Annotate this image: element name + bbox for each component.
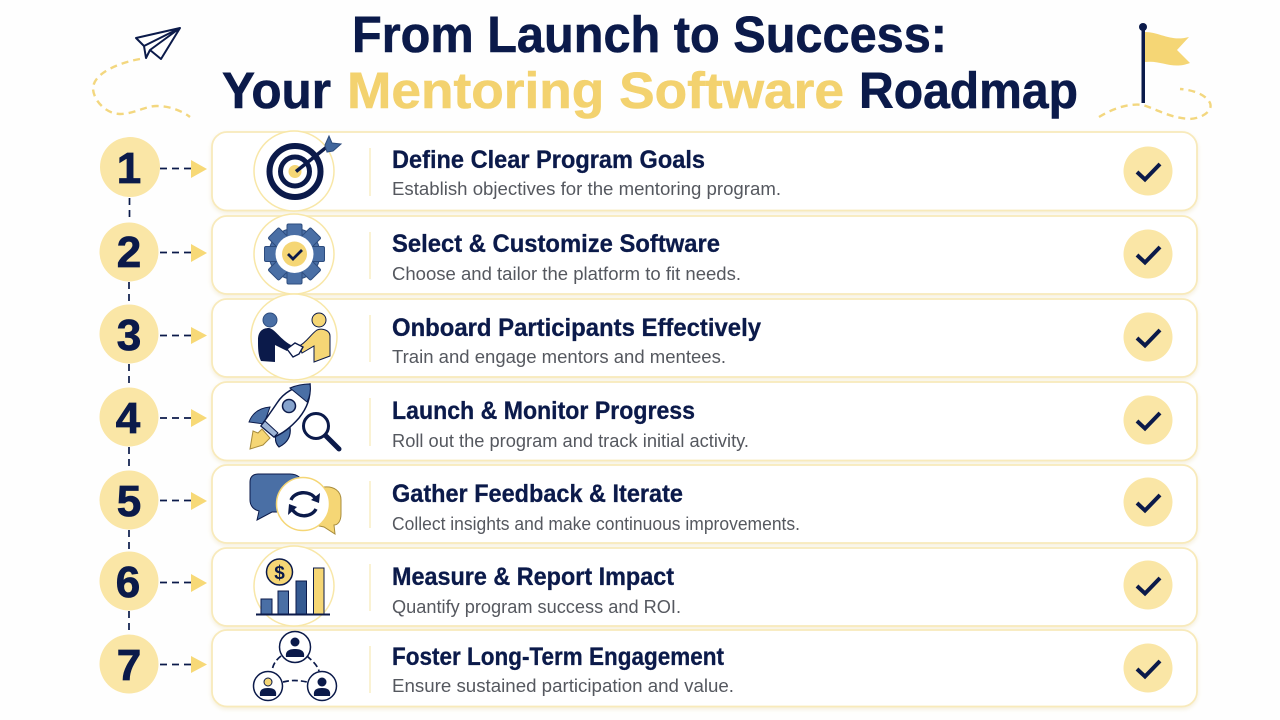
divider (369, 315, 371, 362)
arrow 7 (160, 656, 207, 673)
check 7 (1124, 644, 1172, 692)
divider (369, 398, 371, 446)
icon: target with arrow (254, 131, 341, 211)
title: Your (222, 62, 331, 119)
card 7 (212, 630, 1197, 706)
icon: flag with dashed trail (1099, 23, 1211, 119)
heading and text 3: Onboard Participants Effectively (392, 314, 761, 342)
icon: coin and bar chart: $ (274, 563, 285, 584)
heading and text 6: Measure & Report Impact (392, 563, 675, 591)
number badge 5: 5 (117, 477, 141, 526)
heading and text 4: Roll out the program and track initial activity. (392, 431, 749, 451)
number badge 7 (100, 634, 158, 694)
card 2 (212, 216, 1197, 294)
arrow 4 (160, 409, 207, 427)
heading and text 6 (392, 563, 681, 617)
icon: connected people network (254, 632, 336, 700)
icon: paper plane with dashed trail (93, 28, 190, 117)
heading and text 2: Choose and tailor the platform to fit needs. (392, 264, 741, 284)
title: Mentoring Software (347, 62, 844, 119)
number badge 2: 2 (117, 228, 141, 277)
divider (369, 481, 371, 528)
divider (369, 148, 371, 196)
number badge 1: 1 (117, 144, 141, 193)
icon: handshake (251, 294, 337, 380)
icon: rocket and magnifier (249, 384, 339, 449)
icon: gear with check (254, 214, 334, 294)
card 1 (212, 132, 1197, 210)
step 7 (100, 630, 1197, 706)
step 5 (100, 465, 1197, 543)
title: Roadmap (859, 62, 1078, 119)
arrow 5 (160, 492, 207, 510)
heading and text 7: Foster Long-Term Engagement (392, 643, 725, 671)
number badge 6 (100, 552, 158, 610)
heading and text 6: Quantify program success and ROI. (392, 597, 681, 617)
heading and text 1 (392, 146, 781, 199)
title: From Launch to Success: (352, 6, 947, 63)
number badge 3 (100, 304, 158, 364)
title (222, 6, 1078, 119)
card 5 (212, 465, 1197, 543)
number badge 6: 6 (116, 558, 140, 607)
heading and text 5: Collect insights and make continuous improvements. (392, 514, 800, 534)
divider (369, 646, 371, 693)
heading and text 2: Select & Customize Software (392, 230, 720, 258)
heading and text 3: Train and engage mentors and mentees. (392, 347, 726, 367)
heading and text 1: Establish objectives for the mentoring program. (392, 179, 781, 199)
heading and text 4 (392, 397, 749, 451)
number badge 3: 3 (117, 311, 141, 360)
number badge 5 (100, 470, 158, 530)
heading and text 7: Ensure sustained participation and value. (392, 676, 734, 696)
step 4 (100, 382, 1197, 460)
heading and text 4: Launch & Monitor Progress (392, 397, 695, 425)
divider (369, 232, 371, 279)
step 6 (100, 546, 1197, 626)
arrow 2 (160, 244, 207, 262)
heading and text 3 (392, 314, 761, 367)
heading and text 1: Define Clear Program Goals (392, 146, 705, 174)
arrow 6 (160, 574, 207, 592)
check 3 (1124, 312, 1172, 362)
icon: chat bubbles with refresh (250, 474, 341, 534)
number badge 7: 7 (117, 641, 141, 690)
check 5 (1124, 478, 1172, 526)
check 4 (1124, 396, 1172, 444)
timeline connector (128, 198, 130, 634)
card 6 (212, 548, 1197, 626)
number badge 1 (100, 137, 160, 197)
icon: coin and bar chart (254, 546, 334, 626)
number badge 4: 4 (116, 394, 141, 443)
check 2 (1124, 230, 1172, 278)
step 3 (100, 294, 1197, 380)
check 6 (1124, 560, 1172, 610)
card 4 (212, 382, 1197, 460)
number badge 2 (100, 222, 158, 282)
heading and text 2 (392, 230, 741, 284)
arrow 1 (160, 160, 207, 178)
card 3 (212, 299, 1197, 377)
check 1 (1124, 146, 1172, 196)
number badge 4 (100, 388, 158, 446)
arrow 3 (160, 327, 207, 344)
step 1 (100, 131, 1197, 211)
divider (369, 564, 371, 611)
step 2 (100, 214, 1197, 294)
heading and text 7 (392, 643, 734, 696)
heading and text 5: Gather Feedback & Iterate (392, 480, 683, 508)
heading and text 5 (392, 480, 800, 534)
